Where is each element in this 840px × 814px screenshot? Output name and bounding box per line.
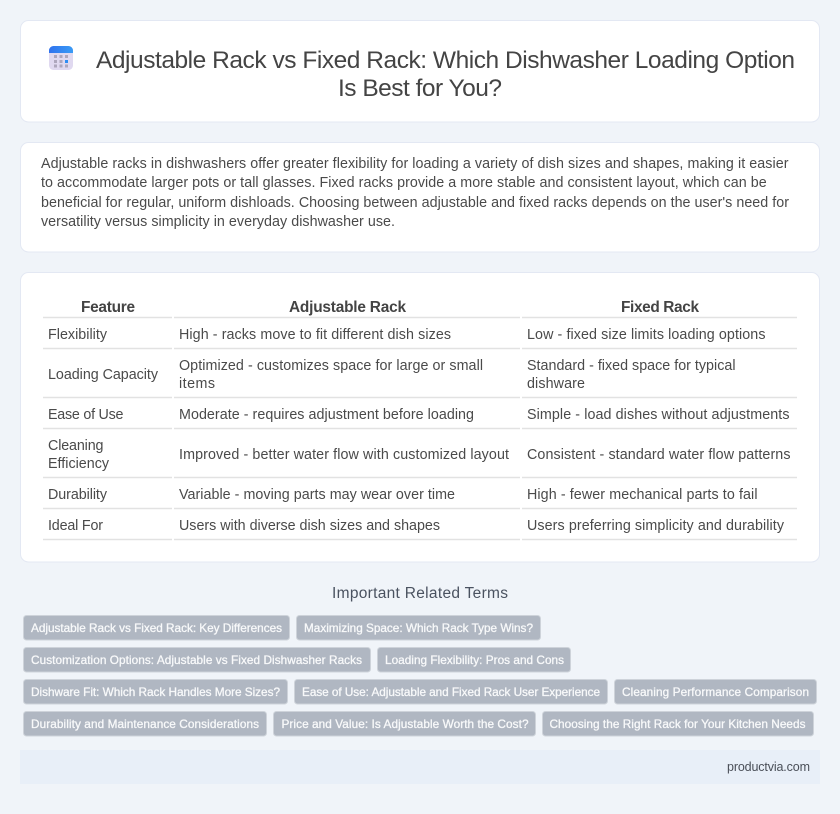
row: cleaning efficiency: Improved - better water flow with customized layout [179,447,509,463]
row: cleaning efficiency: Efficiency [48,456,110,472]
row: durability: Durability [48,487,108,503]
tag [24,712,266,736]
tag: Cleaning Performance Comparison [622,685,809,699]
text block: summary: to accommodate larger pots or tall glasses. Fixed racks provide a more stable and consistent layout, which can be [41,175,767,191]
tag [24,616,290,640]
title: Adjustable Rack vs Fixed Rack: Which Dishwasher Loading Option [96,47,795,74]
tag [542,712,814,736]
tag [294,680,608,704]
row: ideal for: Ideal For [48,518,103,534]
row: durability: Variable - moving parts may wear over time [179,487,455,503]
tag [378,648,570,672]
row: cleaning efficiency: Cleaning [48,438,104,454]
row: loading capacity: Optimized - customizes space for large or small [179,358,483,374]
row: cleaning efficiency [48,438,790,472]
row: durability [48,487,758,503]
panel: comparison table [20,272,820,562]
panel: summary paragraph [20,142,820,252]
tag [274,712,536,736]
tag: Durability and Maintenance Considerations [31,717,259,731]
tag [614,680,816,704]
title [96,47,795,102]
row: flexibility [48,327,766,343]
row: cleaning efficiency: Consistent - standard water flow patterns [527,447,790,463]
tag: Choosing the Right Rack for Your Kitchen Needs [550,717,806,731]
row: ease of use [48,407,790,423]
heading: important related terms: Important Related Terms [332,585,508,602]
row: loading capacity: items [179,376,215,392]
text block: summary: versatility versus simplicity in everyday dishwasher use. [41,214,395,230]
tag [296,616,540,640]
row: loading capacity: Loading Capacity [48,367,159,383]
row: flexibility: Flexibility [48,327,108,343]
row: loading capacity: Standard - fixed space for typical [527,358,736,374]
tag [24,680,288,704]
row: ease of use: Ease of Use [48,407,124,423]
tag: Price and Value: Is Adjustable Worth the Cost? [282,717,529,731]
text block: summary [41,156,789,230]
row: ease of use: Moderate - requires adjustment before loading [179,407,474,423]
title: Is Best for You? [338,75,502,102]
text block: summary: Adjustable racks in dishwashers offer greater flexibility for loading a variety of dish sizes and shapes, making it easier [41,156,789,172]
tag: Loading Flexibility: Pros and Cons [385,653,564,667]
row: loading capacity [48,358,736,392]
table header row: Feature [81,299,135,316]
tag: Dishware Fit: Which Rack Handles More Sizes? [31,685,280,699]
text block: summary: beneficial for regular, uniform dishloads. Choosing between adjustable and fixed racks depends on the user's need for [41,195,789,211]
row: ideal for [48,518,785,534]
panel: title header [20,20,820,122]
tags: related terms [24,616,816,736]
tag [24,648,370,672]
row: ease of use: Simple - load dishes without adjustments [527,407,790,423]
tag: Customization Options: Adjustable vs Fixed Dishwasher Racks [31,653,362,667]
row: loading capacity: dishware [527,376,585,392]
tag: Ease of Use: Adjustable and Fixed Rack User Experience [302,685,600,699]
table header row: Adjustable Rack [289,299,406,316]
row: ideal for: Users with diverse dish sizes and shapes [179,518,440,534]
row: ideal for: Users preferring simplicity and durability [527,518,785,534]
row: flexibility: Low - fixed size limits loading options [527,327,766,343]
footer [20,750,820,784]
row: flexibility: High - racks move to fit different dish sizes [179,327,451,343]
row: durability: High - fewer mechanical parts to fail [527,487,758,503]
table header row: Fixed Rack [621,299,699,316]
icon: calendar [49,46,73,70]
tag: Adjustable Rack vs Fixed Rack: Key Differences [31,621,282,635]
footer credit: productvia.com [727,760,810,774]
tag: Maximizing Space: Which Rack Type Wins? [304,621,533,635]
table header row [81,299,699,316]
